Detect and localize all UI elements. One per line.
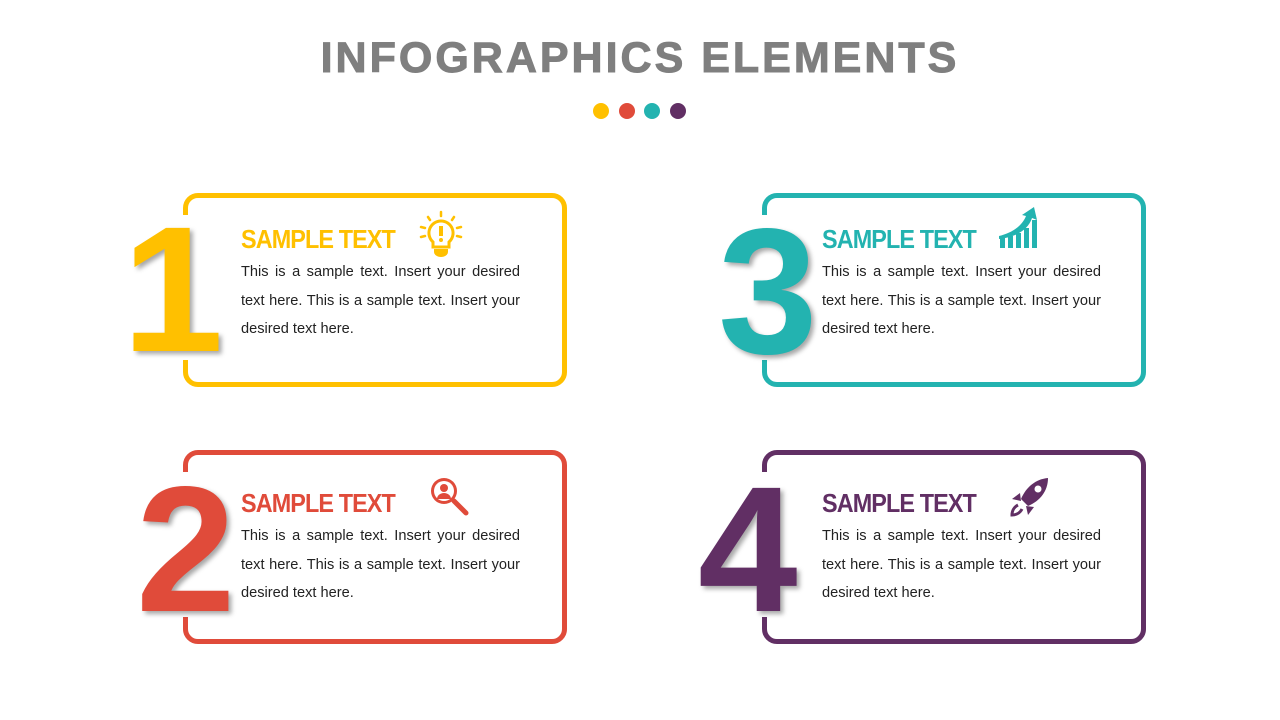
icon: light bulb xyxy=(420,210,462,257)
heading: SAMPLE TEXT xyxy=(241,488,395,518)
number 3: 3 xyxy=(718,191,818,391)
panel: 4 xyxy=(698,449,1146,649)
number 1: 1 xyxy=(122,189,224,389)
heading: SAMPLE TEXT xyxy=(822,488,976,518)
panel: 2 xyxy=(136,449,567,649)
icon: growth chart xyxy=(999,207,1037,248)
panel: 3 xyxy=(718,191,1146,391)
panel: 1 xyxy=(122,189,567,389)
body text: This is a sample text. Insert your desired text here. This is a sample text. Insert your desired text here. xyxy=(822,264,1101,337)
number 4: 4 xyxy=(698,449,798,649)
title: INFOGRAPHICS ELEMENTS xyxy=(321,34,959,82)
body text: This is a sample text. Insert your desired text here. This is a sample text. Insert your desired text here. xyxy=(241,264,520,337)
heading: SAMPLE TEXT xyxy=(822,224,976,254)
body text: This is a sample text. Insert your desired text here. This is a sample text. Insert your desired text here. xyxy=(241,528,520,601)
heading: SAMPLE TEXT xyxy=(241,224,395,254)
number 2: 2 xyxy=(136,449,236,649)
body text: This is a sample text. Insert your desired text here. This is a sample text. Insert your desired text here. xyxy=(822,528,1101,601)
icon: magnifier xyxy=(431,478,468,516)
dots xyxy=(593,103,686,119)
icon: rocket xyxy=(1010,478,1048,516)
